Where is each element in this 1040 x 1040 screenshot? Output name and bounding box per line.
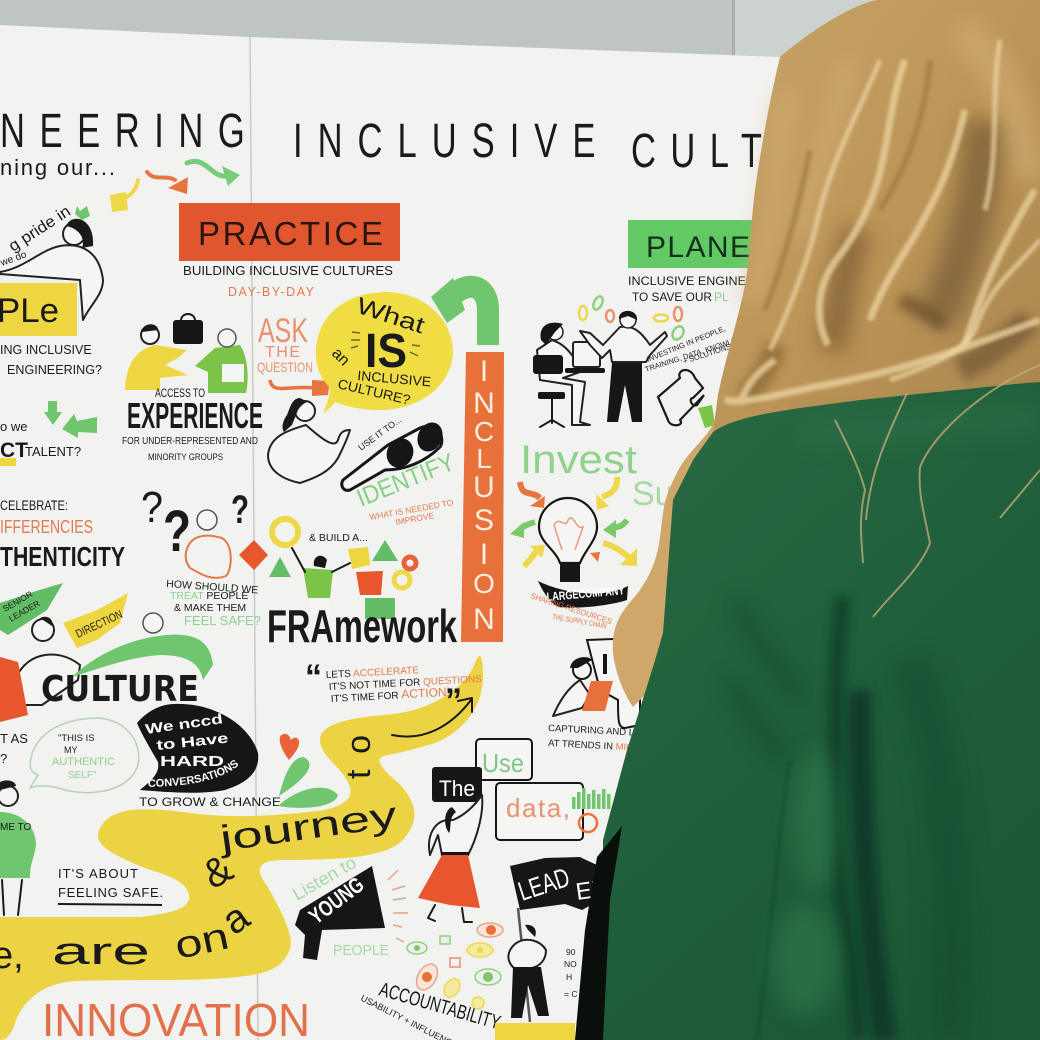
- text: authenticity: THENTICITY: [0, 541, 125, 572]
- small dots: [579, 295, 686, 342]
- speech bubble: what is an inclusive culture: IS: [365, 325, 407, 378]
- panel: practice: [179, 203, 400, 261]
- subtitle: ning our...: [0, 155, 115, 180]
- text: feeling safe: IT'S ABOUT: [58, 866, 138, 881]
- text: as: ?: [0, 751, 7, 766]
- text: journey road: are: [52, 931, 150, 973]
- text: experience: FOR UNDER-REPRESENTED AND: [122, 436, 258, 447]
- text: authenticity: IFFERENCIES: [0, 517, 93, 537]
- speech bubble: authentic self: AUTHENTIC: [52, 756, 115, 768]
- text: as: T AS: [0, 731, 28, 746]
- icon: binoculars: [342, 418, 447, 490]
- people: desk workers: [533, 311, 667, 427]
- speech bubble: authentic self: MY: [64, 745, 78, 755]
- text: practice subtitle: BUILDING INCLUSIVE CULTURES: [183, 264, 393, 278]
- text: attract talent: o we: [0, 419, 27, 434]
- text: journey road: [0, 794, 399, 977]
- hair lock over the shoulder: [613, 395, 722, 707]
- hair strands over jacket: [835, 365, 1040, 617]
- title: [0, 103, 762, 177]
- megaphone: listen to young people: [289, 852, 408, 960]
- small text: right edge: NO: [564, 959, 577, 969]
- text: people: ING INCLUSIVE: [0, 343, 92, 357]
- callouts: the and use: [432, 739, 532, 802]
- banner: inclusion with arrow: N: [473, 387, 495, 420]
- person: made in: we do: [0, 249, 29, 269]
- banner: inclusion with arrow: O: [473, 568, 495, 599]
- heading: invest: Su: [632, 475, 674, 513]
- yellow strip bottom: [495, 1023, 575, 1040]
- text: journey road: a: [214, 894, 258, 943]
- flag: leader with person: ER: [574, 875, 611, 906]
- text: treat people: & MAKE THEM: [174, 602, 246, 614]
- text: identify: WHAT IS NEEDED TO: [369, 497, 454, 522]
- person: green shirt left: ME TO: [0, 822, 32, 833]
- text: quote: [305, 658, 483, 720]
- person: made in: g pride in: [6, 203, 74, 255]
- person: made in: [0, 203, 103, 320]
- label: senior leaders: SENIOR: [1, 589, 34, 614]
- text: investing: + SOLUTIONS: [682, 342, 732, 366]
- panel: white board: [0, 25, 780, 1040]
- icon: question marks with person: [141, 483, 268, 578]
- hair: [713, 0, 1040, 432]
- text: planet subtitle: [628, 274, 746, 304]
- heading: invest: Invest: [520, 438, 637, 482]
- person: laptop: [553, 638, 640, 728]
- wall behind the board: [0, 0, 1040, 70]
- logo: large company: THE SUPPLY CHAIN: [552, 612, 607, 631]
- flag: leader with person: LEAD: [515, 862, 573, 907]
- text: authenticity: CELEBRATE:: [0, 498, 68, 513]
- small text: right edge: [564, 947, 577, 999]
- text: as: [0, 731, 28, 766]
- title: CULT: [631, 123, 762, 177]
- speech bubble: what is an inclusive culture: an: [328, 345, 353, 369]
- text: practice subtitle: [183, 264, 393, 299]
- small text: right edge: H: [566, 972, 572, 982]
- icon: puzzle piece: [658, 370, 704, 425]
- megaphone: listen to young people: PEOPLE: [333, 942, 389, 959]
- icon: green blob behind hair: [698, 405, 715, 428]
- text: treat people: TREAT PEOPLE: [170, 590, 248, 602]
- banner: inclusion with arrow: U: [473, 471, 495, 504]
- person: framework figure: [292, 548, 350, 615]
- panel: culture: [0, 613, 213, 722]
- person: green shirt left: [0, 780, 36, 915]
- text: experience: EXPERIENCE: [127, 395, 263, 436]
- banner: inclusion with arrow: L: [476, 443, 492, 474]
- text: experience: ACCESS TO: [155, 386, 205, 400]
- label: senior leaders: [0, 583, 63, 635]
- banner: inclusion with arrow: [431, 278, 504, 642]
- panel: culture: CULTURE: [41, 669, 199, 710]
- label: senior leaders: LEADER: [7, 598, 41, 624]
- text: attract talent: [0, 419, 81, 466]
- speech bubble: authentic self: SELF": [68, 770, 97, 781]
- callout: data chart: data,: [506, 793, 570, 823]
- panel: people: [0, 283, 77, 336]
- title: INCLUSIVE: [293, 113, 595, 167]
- text: quote: “: [305, 658, 322, 696]
- jacket: [603, 382, 1040, 1040]
- text: treat people: [166, 578, 261, 628]
- text: feeling safe: FEELING SAFE.: [58, 885, 163, 900]
- text: people: ENGINEERING?: [7, 363, 102, 377]
- megaphone: listen to young people: Listen to: [289, 852, 360, 904]
- text: to: to: [340, 735, 378, 779]
- icon: question marks with person: ?: [163, 499, 191, 564]
- text: treat people: FEEL SAFE?: [184, 613, 261, 628]
- text: identify: IMPROVE: [395, 510, 435, 527]
- panel: practice: PRACTICE: [198, 215, 383, 252]
- text: planet subtitle: INCLUSIVE ENGINE: [628, 274, 746, 288]
- text: ask the question: ASK: [258, 312, 308, 350]
- text: planet subtitle: TO SAVE OUR: [632, 290, 712, 304]
- text: identify: IDENTIFY: [353, 448, 459, 513]
- text: to grow and change: TO GROW & CHANGE: [139, 795, 281, 809]
- text: capturing: [548, 723, 649, 754]
- speech bubble: hard conversations: We nccd: [144, 710, 224, 737]
- text: ask the question: THE: [265, 344, 300, 361]
- banner: inclusion with arrow: I: [480, 538, 488, 571]
- text: ask the question: QUESTION: [257, 359, 313, 375]
- text: quote: ”: [445, 682, 462, 720]
- small text: right edge: = C: [564, 989, 577, 999]
- text: quote: LETS ACCELERATE: [326, 665, 420, 681]
- callouts: the and use: The: [439, 776, 475, 801]
- banner: inclusion with arrow: C: [474, 416, 494, 447]
- panel: planet: [628, 220, 753, 268]
- text: investing: INVESTING IN PEOPLE,: [645, 324, 727, 364]
- text: journey road: on: [171, 915, 233, 968]
- person: red skirt: [418, 795, 482, 922]
- speech bubble: hard conversations: to Have: [156, 730, 229, 753]
- banner: inclusion with arrow: S: [474, 504, 494, 537]
- text: identify: [353, 415, 459, 527]
- text: accountability: [359, 979, 503, 1040]
- speech bubble: what is an inclusive culture: What: [353, 292, 429, 339]
- text: experience: [122, 386, 263, 463]
- logo: large company: [529, 581, 628, 631]
- banner: inclusion with arrow: I: [480, 355, 488, 388]
- callouts: the and use: Use: [482, 748, 524, 778]
- text: treat people: HOW SHOULD WE: [166, 578, 259, 596]
- text: authenticity: [0, 498, 125, 572]
- framework shapes: [269, 519, 416, 619]
- panel: planet: PLANE: [646, 231, 750, 264]
- speech bubble: hard conversations: HARD: [160, 753, 224, 770]
- text: feeling safe: [58, 866, 163, 905]
- speech bubble: what is an inclusive culture: CULTURE?: [336, 376, 412, 408]
- black undershirt: [575, 826, 622, 1040]
- text: planet subtitle: PL: [714, 290, 729, 304]
- logo: large company: LARGECOMPANY: [546, 583, 625, 604]
- speech bubble: hard conversations: CONVERSATIONS: [148, 760, 238, 787]
- heading: framework: FRAmework: [267, 600, 457, 652]
- small text: right edge: 90: [566, 947, 576, 957]
- flag: leader with person: [508, 857, 611, 1022]
- people: access to experience: [125, 314, 248, 393]
- label: direction: [63, 593, 128, 648]
- text: quote: IT'S TIME FOR ACTION!: [330, 685, 450, 705]
- speech bubble: authentic self: "THIS IS: [58, 733, 95, 744]
- arrow: road curve: [392, 698, 472, 737]
- label: direction: DIRECTION: [74, 609, 125, 641]
- text: investing: TRAINING, DATA, KNOWLEDGE: [644, 331, 753, 374]
- logo: large company: SHARING RESOURCES: [529, 591, 613, 626]
- text: quote: IT'S NOT TIME FOR QUESTIONS: [329, 674, 483, 693]
- eyes: [407, 923, 503, 1009]
- icon: heart and leaves: [278, 734, 338, 808]
- title: NEERING: [0, 103, 245, 157]
- callout: data chart: [496, 783, 610, 840]
- text: attract talent: CT: [0, 439, 28, 462]
- text: practice subtitle: DAY-BY-DAY: [228, 285, 315, 299]
- speech bubble: what is an inclusive culture: [316, 292, 453, 413]
- text: people: [0, 343, 102, 377]
- speech bubble: hard conversations: [137, 704, 258, 793]
- speech bubble: authentic self: [30, 718, 139, 793]
- text: capturing: CAPTURING AND LOO: [548, 723, 649, 739]
- text: ask the question: [257, 312, 313, 375]
- icon: light bulb with arrows: [510, 477, 637, 582]
- text: capturing: AT TRENDS IN MICR: [548, 738, 640, 754]
- text: journey road: journey: [216, 794, 399, 859]
- text: attract talent: TALENT?: [25, 444, 81, 459]
- arrow: ask: [270, 380, 330, 396]
- framework shapes: & BUILD A...: [309, 532, 368, 544]
- speech bubble: what is an inclusive culture: INCLUSIVE: [357, 368, 432, 389]
- yellow journey road: [0, 656, 483, 1040]
- heading: invest: [520, 438, 674, 513]
- banner: inclusion with arrow: N: [473, 603, 495, 636]
- megaphone: listen to young people: YOUNG: [304, 872, 369, 929]
- text: identify: USE IT TO...: [356, 415, 403, 453]
- icon: question marks with person: ?: [141, 483, 163, 532]
- text: journey road: &: [195, 846, 240, 898]
- arrows: top: [110, 161, 240, 212]
- text: experience: MINORITY GROUPS: [148, 452, 223, 463]
- arrows: green: [44, 401, 97, 438]
- icon: question marks with person: ?: [231, 488, 249, 532]
- person: thinking: [268, 398, 350, 483]
